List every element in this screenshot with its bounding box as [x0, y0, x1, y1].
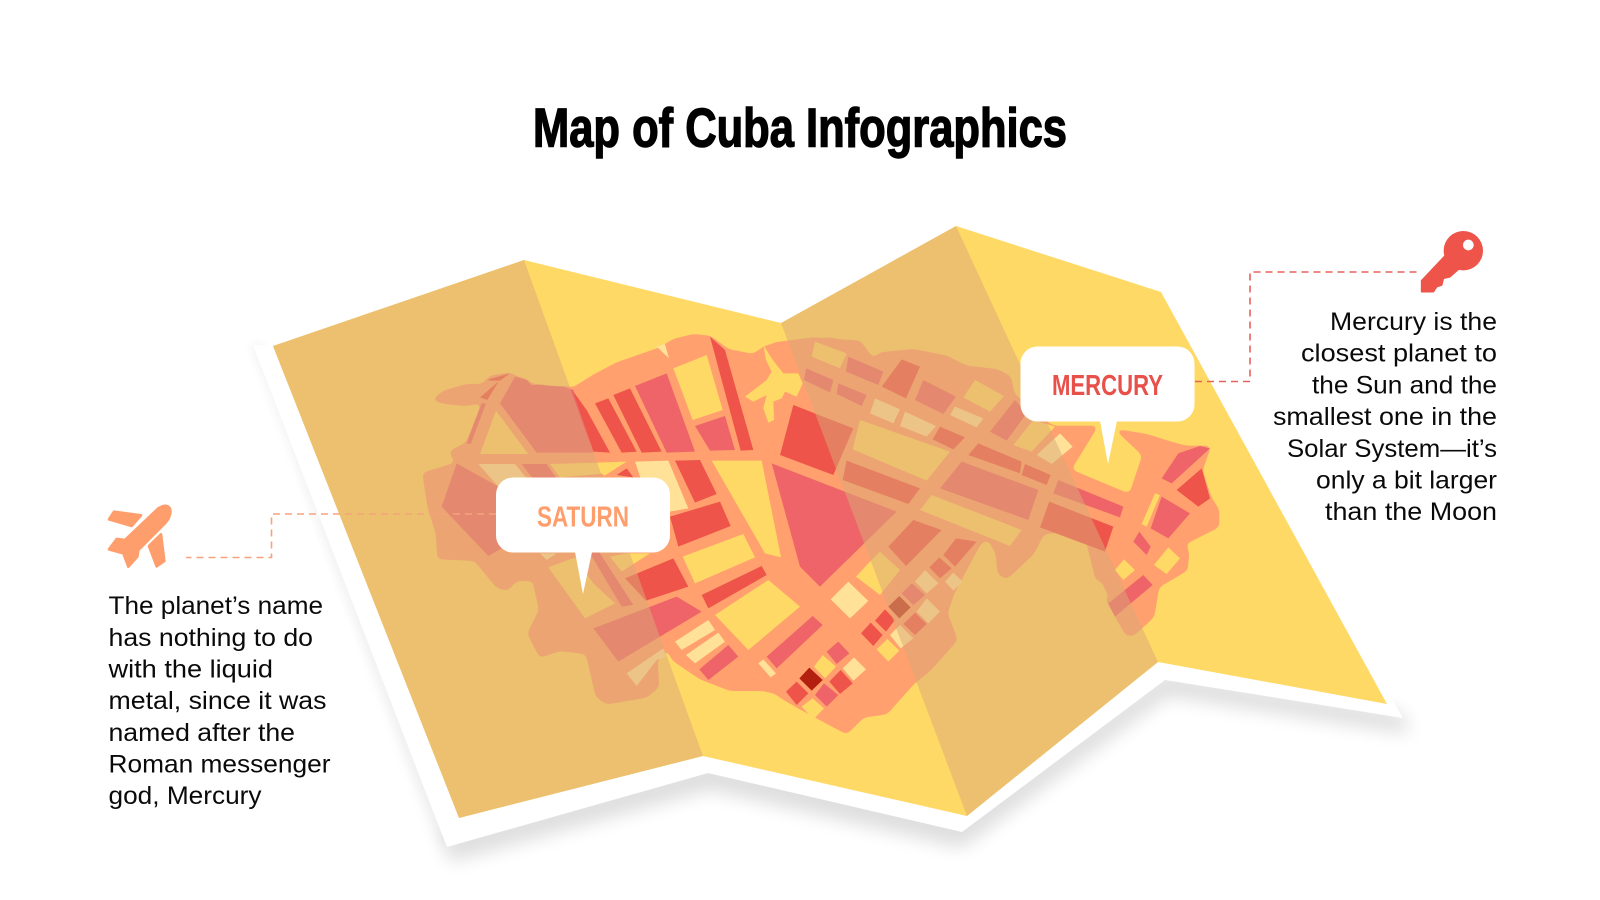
shaded fold panels — [273, 226, 1158, 818]
western city blocks — [442, 337, 800, 686]
text block: left description: The planet’s name — [108, 592, 323, 620]
map drop shadow — [262, 360, 1410, 862]
text block: left description: named after the — [108, 719, 295, 747]
map white backing — [253, 292, 1403, 847]
text block: left description: god, Mercury — [108, 782, 262, 810]
folded paper map — [250, 226, 1410, 862]
text block: left description: metal, since it was — [108, 687, 326, 715]
connector: mercury to key — [1195, 272, 1421, 382]
text block: right description: the Sun and the — [1312, 372, 1497, 400]
callout: saturn — [496, 478, 670, 594]
text block: left description: Roman messenger — [108, 750, 330, 778]
inland bay — [745, 345, 803, 423]
central and eastern city blocks — [767, 342, 1210, 719]
connector: saturn to plane — [186, 514, 496, 558]
text block: right description: closest planet to — [1301, 340, 1497, 368]
callout: mercury — [1020, 346, 1194, 464]
icon: key — [1422, 231, 1483, 292]
callout: mercury: MERCURY — [1052, 370, 1163, 402]
text block: left description: with the liquid — [107, 656, 273, 684]
map edge shadow — [250, 342, 452, 846]
text block: right description: only a bit larger — [1316, 466, 1497, 494]
text block: left description: has nothing to do — [108, 624, 313, 652]
map yellow sheet — [273, 226, 1387, 818]
callout: saturn: SATURN — [537, 502, 629, 534]
text block: left description — [107, 592, 330, 810]
title: Map of Cuba Infographics — [533, 96, 1067, 158]
text block: right description: smallest one in the — [1273, 403, 1497, 431]
text block: right description — [1273, 308, 1497, 526]
Cuba landmass — [423, 335, 1218, 733]
text block: right description: Mercury is the — [1330, 308, 1497, 336]
icon: airplane — [109, 506, 170, 567]
text block: right description: than the Moon — [1325, 498, 1497, 526]
text block: right description: Solar System—it’s — [1287, 435, 1497, 463]
